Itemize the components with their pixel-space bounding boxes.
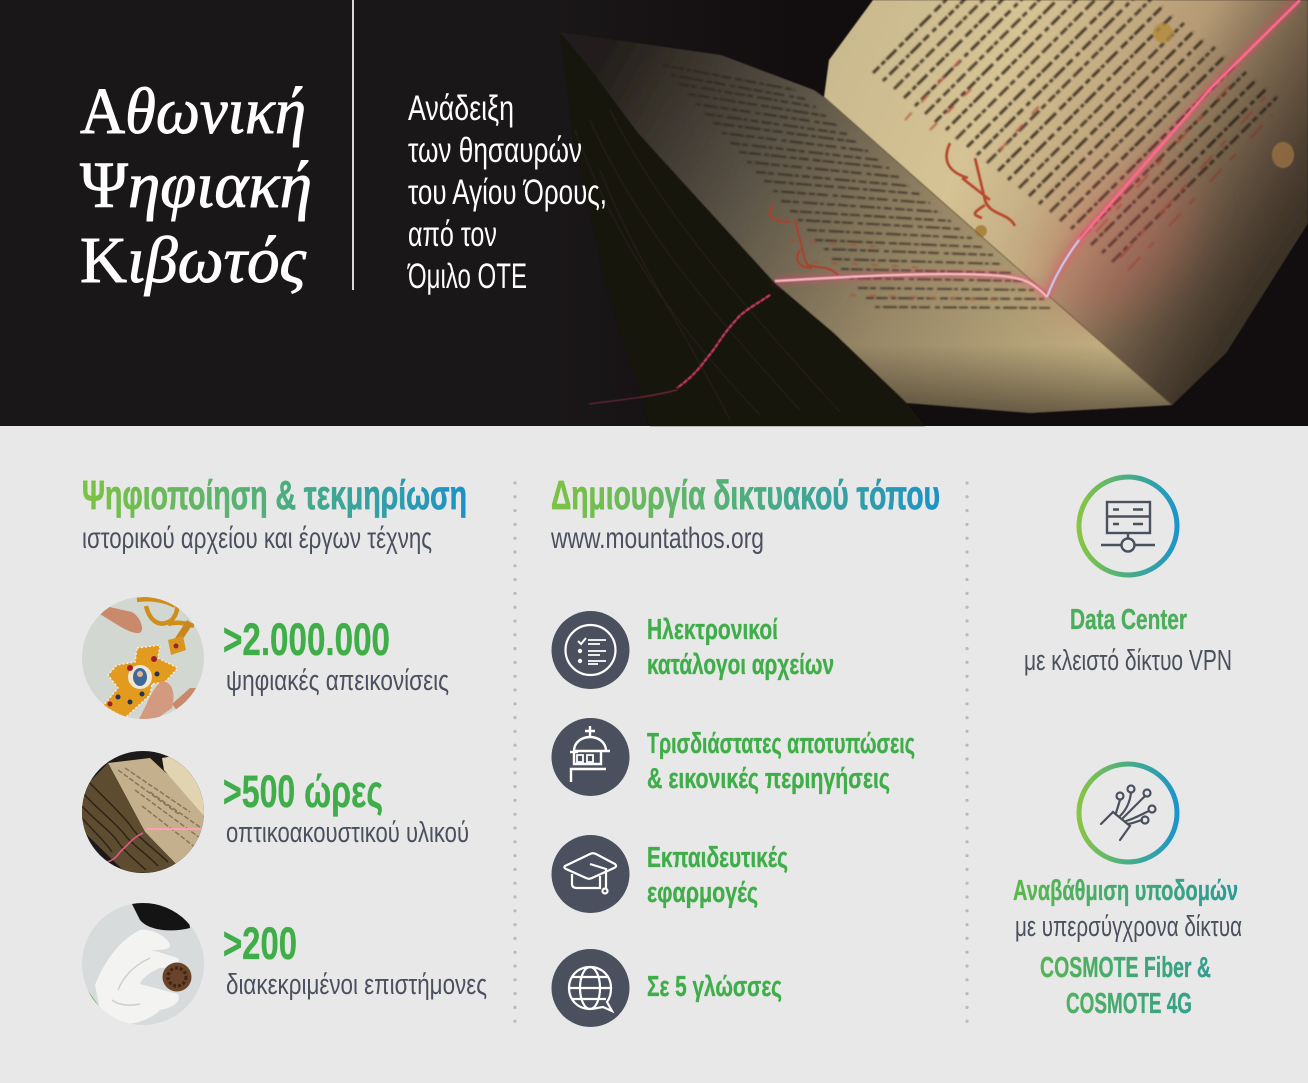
red initial right page xyxy=(947,143,1015,226)
panel: website xyxy=(550,472,940,1027)
subtitle: των θησαυρών xyxy=(408,131,582,170)
heading: website: Δημιουργία δικτυακού τόπου xyxy=(551,472,940,518)
subtitle: του Αγίου Όρους, xyxy=(408,173,607,212)
laser glow wash on page xyxy=(1016,132,1224,348)
text: infrastructure upgrade: COSMOTE Fiber & xyxy=(1040,952,1211,984)
text: infrastructure upgrade: COSMOTE 4G xyxy=(1066,988,1192,1020)
stat: distinguished scientists: διακεκριμένοι επιστήμονες xyxy=(226,969,487,1001)
stat: hours of audiovisual material: οπτικοακουστικού υλικού xyxy=(226,817,469,849)
photo: gold cross xyxy=(80,595,206,722)
title: Ψηφιακή xyxy=(80,149,312,222)
text: educational applications xyxy=(647,842,788,909)
text: electronic catalogues: Ηλεκτρονικοί xyxy=(647,614,778,646)
title: Κιβωτός xyxy=(80,224,307,297)
heading: digitisation: Ψηφιοποίηση & τεκμηρίωση xyxy=(82,472,467,518)
text: educational applications: Εκπαιδευτικές xyxy=(647,842,788,874)
page stains xyxy=(1153,23,1173,43)
icon: graduation cap xyxy=(552,835,630,913)
photo: gloved hand with seal xyxy=(80,900,206,1030)
panel: infrastructure xyxy=(1013,477,1242,1020)
hero banner xyxy=(0,0,1308,426)
stat: digital images xyxy=(223,614,449,697)
text: electronic catalogues: κατάλογοι αρχείων xyxy=(647,649,834,681)
stat: distinguished scientists xyxy=(223,918,487,1001)
text: infrastructure upgrade xyxy=(1013,875,1242,1020)
vertical divider xyxy=(352,0,354,290)
stat: distinguished scientists: >200 xyxy=(223,918,297,969)
icon: checklist xyxy=(552,611,630,689)
icon: chapel xyxy=(552,718,630,796)
panel: digitisation xyxy=(80,472,487,1030)
subtitle: Ανάδειξη xyxy=(408,89,514,128)
subheading: digitisation: ιστορικού αρχείου και έργων τέχνης xyxy=(82,522,432,555)
text: educational applications: εφαρμογές xyxy=(647,877,758,909)
page background xyxy=(0,426,1308,1083)
title: Αθωνική xyxy=(80,75,306,148)
text: data center with VPN: με κλειστό δίκτυο VPN xyxy=(1024,645,1232,677)
stat: digital images: ψηφιακές απεικονίσεις xyxy=(226,665,449,697)
icon: fibre optics xyxy=(1079,764,1177,862)
text: 3D imprints and virtual tours: Τρισδιάστατες αποτυπώσεις xyxy=(647,728,915,760)
subtitle: Όμιλο ΟΤΕ xyxy=(407,257,527,296)
text: data center with VPN xyxy=(1024,604,1232,677)
text: in five languages: Σε 5 γλώσσες xyxy=(647,971,782,1003)
photo: open manuscript with laser line xyxy=(560,0,1308,426)
photo: manuscript under laser xyxy=(80,750,206,876)
text: electronic catalogues xyxy=(647,614,834,681)
text: 3D imprints and virtual tours: & εικονικές περιηγήσεις xyxy=(647,763,890,795)
icon: data center xyxy=(1079,477,1177,575)
stat: digital images: >2.000.000 xyxy=(223,614,390,665)
text: data center with VPN: Data Center xyxy=(1070,604,1187,636)
title xyxy=(80,75,312,297)
laser line xyxy=(589,0,1300,404)
text: 3D imprints and virtual tours xyxy=(647,728,915,795)
stat: hours of audiovisual material xyxy=(223,766,469,849)
stat: hours of audiovisual material: >500 ώρες xyxy=(223,766,383,817)
subtitle xyxy=(407,89,607,296)
red initial left page xyxy=(770,205,838,275)
subtitle: από τον xyxy=(408,215,497,254)
subheading: website url: www.mountathos.org xyxy=(550,522,764,555)
icon: globe with speech tail xyxy=(552,949,630,1027)
